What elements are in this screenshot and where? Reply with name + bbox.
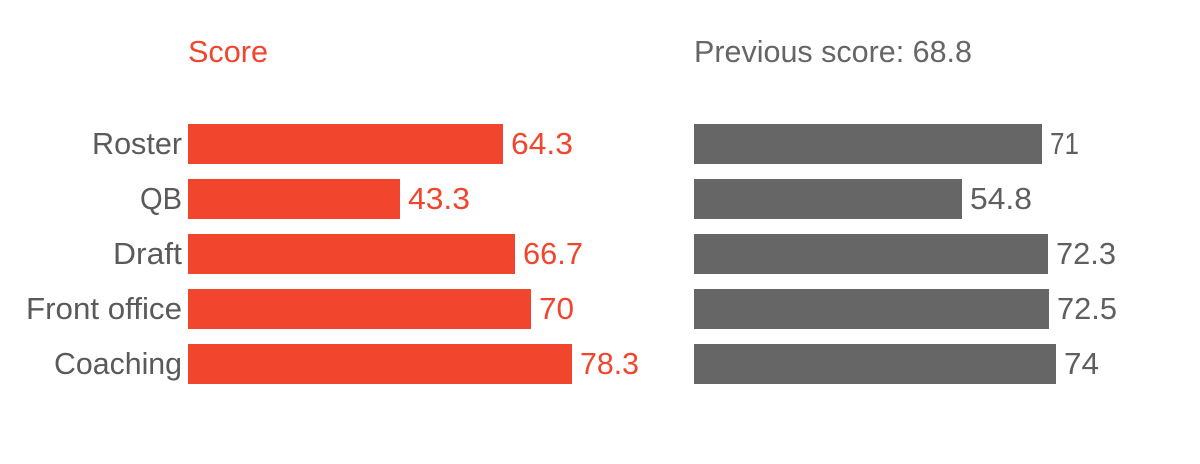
category labels [26,126,182,381]
heading: Score: Score [188,34,268,69]
previous score values: 72.3 [1056,236,1116,271]
previous score values [970,126,1117,381]
category labels: Draft [113,236,182,271]
previous score bars [694,124,1056,384]
score values: 66.7 [523,236,583,271]
heading: Previous score: Previous score: 68.8 [694,34,972,69]
category labels: Front office [26,291,182,326]
score bars [188,124,572,384]
previous score values: 71 [1050,126,1079,161]
score values: 43.3 [408,181,470,216]
score values: 78.3 [580,346,639,381]
score values: 70 [539,291,574,326]
category labels: Coaching [54,346,182,381]
previous score values: 74 [1064,346,1099,381]
previous score values: 72.5 [1057,291,1117,326]
category labels: Roster [92,126,182,161]
score values [408,126,639,381]
score values: 64.3 [511,126,573,161]
previous score values: 54.8 [970,181,1032,216]
category labels: QB [140,181,182,216]
